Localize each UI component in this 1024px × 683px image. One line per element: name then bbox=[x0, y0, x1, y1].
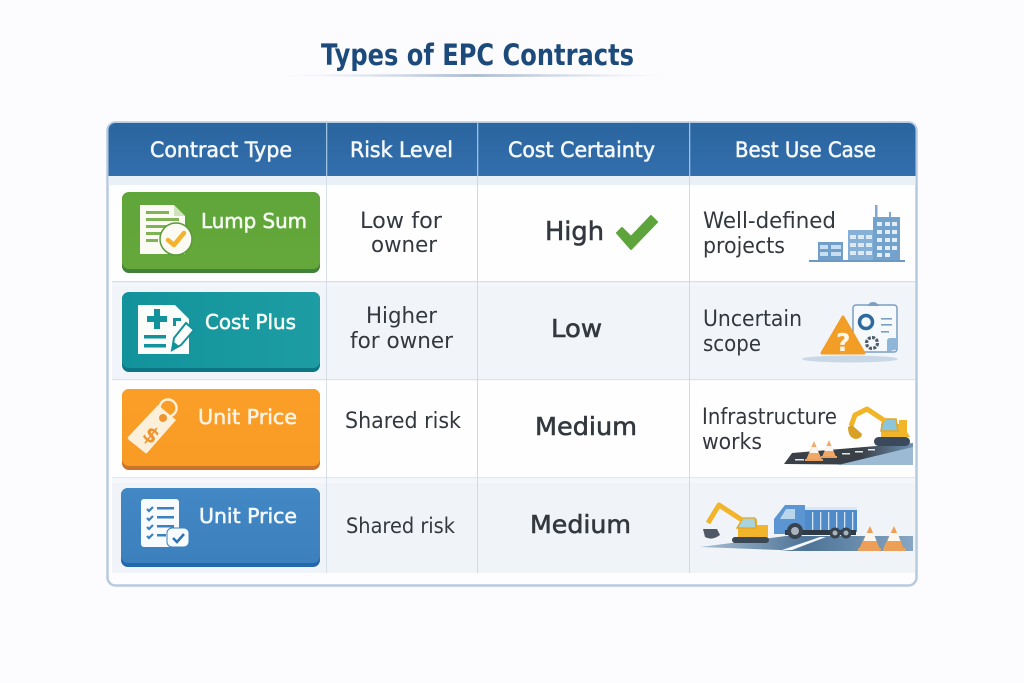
risk: row 1: owner bbox=[371, 233, 438, 258]
use case: Well-defined projects: projects bbox=[703, 234, 785, 259]
header: Risk Level: Risk Level bbox=[350, 138, 453, 162]
risk: row 4: Shared risk bbox=[346, 514, 456, 538]
header: Cost Certainty: Cost Certainty bbox=[508, 138, 655, 162]
cost certainty: Medium row 3: Medium bbox=[535, 412, 637, 441]
icon: green check bbox=[617, 216, 657, 249]
risk: row 1 bbox=[360, 209, 443, 258]
header: Contract Type: Contract Type bbox=[150, 138, 292, 162]
badge: Unit Price blue: Unit Price bbox=[199, 504, 297, 528]
icon: warning and clipboard bbox=[802, 302, 898, 362]
cost certainty: Low: Low bbox=[551, 314, 602, 343]
row backgrounds bbox=[112, 185, 915, 281]
icon: price tag bbox=[128, 400, 176, 453]
badge: Unit Price blue bbox=[121, 488, 320, 567]
title underline bbox=[283, 74, 667, 77]
use case: Uncertain scope: Uncertain bbox=[703, 307, 802, 332]
badge: Cost Plus: Cost Plus bbox=[205, 310, 296, 334]
header row bbox=[108, 123, 916, 176]
icon: road with excavator and cones bbox=[784, 409, 913, 465]
cost certainty: Medium row 4: Medium bbox=[530, 510, 631, 539]
risk: row 3: Shared risk bbox=[345, 409, 461, 434]
use case: Uncertain scope bbox=[703, 307, 802, 357]
icon: price tag: $ bbox=[138, 421, 164, 449]
badge: Cost Plus bbox=[122, 292, 320, 372]
icon: document with plus and pen bbox=[138, 305, 194, 354]
icon: checklist bbox=[141, 499, 189, 547]
risk: row 2: for owner bbox=[350, 329, 454, 354]
header: Best Use Case: Best Use Case bbox=[735, 138, 876, 162]
icon: warning and clipboard: ? bbox=[836, 328, 851, 357]
use case: Infrastructure works: Infrastructure bbox=[702, 405, 837, 430]
cost certainty: High with check: High bbox=[545, 217, 604, 247]
use case: Infrastructure works: works bbox=[702, 430, 762, 455]
table panel bbox=[108, 122, 916, 586]
use case: Well-defined projects bbox=[703, 209, 836, 259]
risk: row 1: Low for bbox=[360, 209, 443, 234]
icon: document with check bbox=[140, 205, 192, 255]
title: Types of EPC Contracts bbox=[321, 38, 634, 72]
risk: row 2: Higher bbox=[366, 304, 438, 329]
badge: Unit Price orange bbox=[122, 389, 320, 470]
risk: row 2 bbox=[350, 304, 454, 354]
badge: Lump Sum bbox=[122, 192, 320, 273]
use case: Uncertain scope: scope bbox=[703, 332, 761, 357]
badge: Lump Sum: Lump Sum bbox=[201, 209, 307, 233]
icon: buildings bbox=[809, 205, 905, 262]
use case: Infrastructure works bbox=[702, 405, 837, 455]
icon: excavator, dump truck and cones bbox=[700, 505, 913, 551]
use case: Well-defined projects: Well-defined bbox=[703, 209, 836, 234]
badge: Unit Price orange: Unit Price bbox=[198, 405, 297, 429]
cost certainty: High with check bbox=[545, 216, 657, 249]
